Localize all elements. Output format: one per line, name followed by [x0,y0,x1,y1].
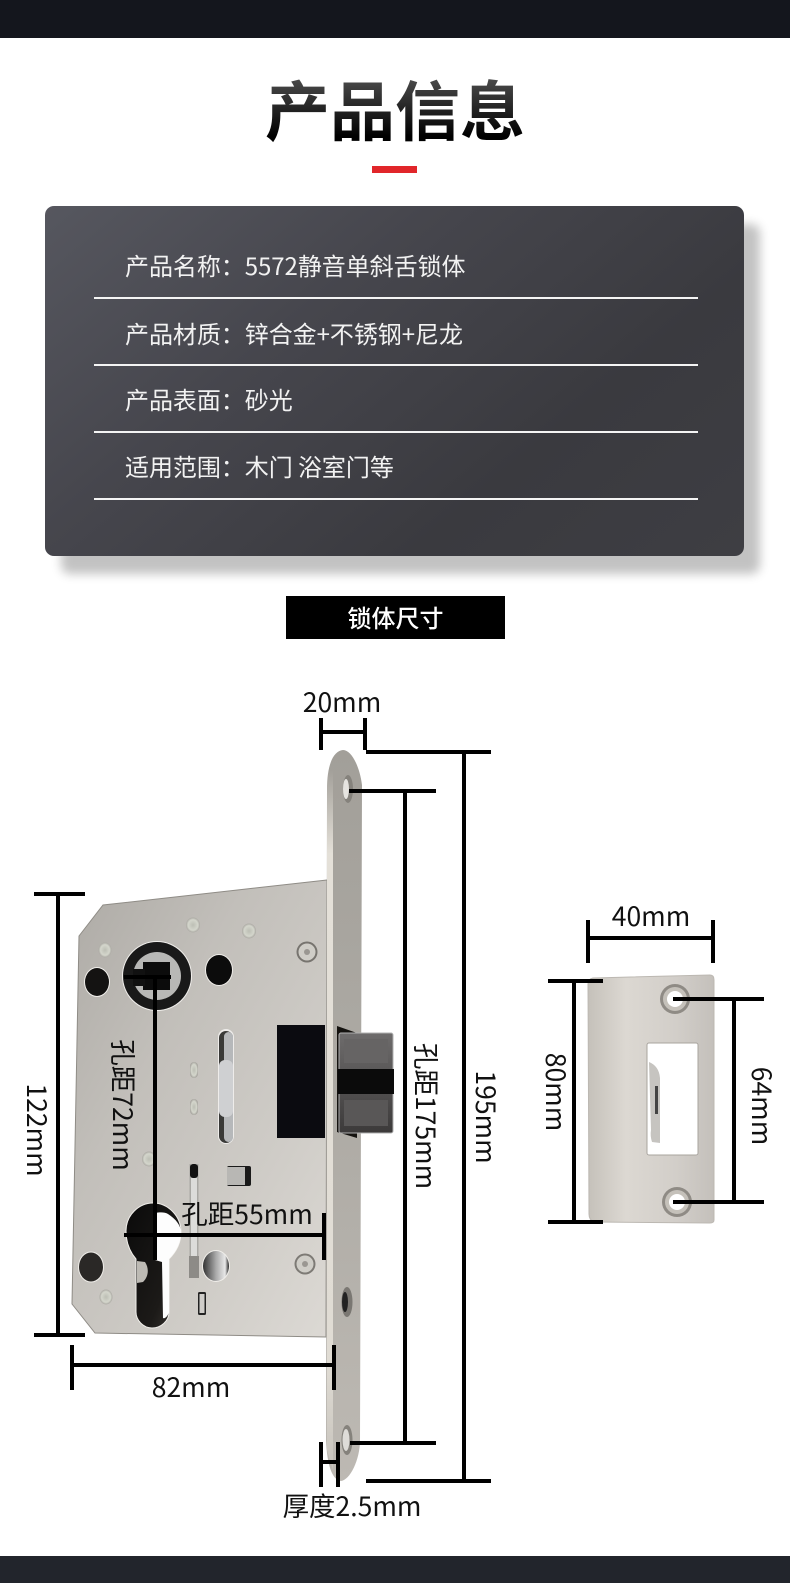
dimension: 122mm [19,894,85,1335]
dimension: thickness 2.5mm: 厚度2.5mm [283,1485,421,1524]
strike plate photo [588,975,714,1223]
black rectangular window [277,1025,325,1138]
spec row: name: 产品名称：5572静音单斜舌锁体 [125,247,465,282]
dimension: hole spacing 55mm [124,1193,324,1260]
dimension: 122mm: 122mm [19,1083,58,1177]
small square window [227,1166,251,1186]
dimension: 20mm: 20mm [303,681,381,720]
key spindle ring [122,941,192,1011]
title: 产品信息 [265,60,525,154]
dimension: hole spacing 55mm: 孔距55mm [181,1193,313,1232]
spec row: usage: 适用范围：木门 浴室门等 [125,448,394,483]
strike window [647,1043,698,1155]
strike screw holes [660,984,692,1217]
spec row: material: 产品材质：锌合金+不锈钢+尼龙 [125,315,463,350]
dimension: 82mm [72,1345,334,1405]
panel: product specs [45,206,744,556]
lock body photo [72,750,394,1481]
top dark band [0,0,790,38]
dimension: 82mm: 82mm [152,1366,230,1405]
dimension: thickness 2.5mm [283,1442,421,1524]
bottom dark band [0,1556,790,1583]
case plate [72,880,327,1337]
strike plate body [588,975,714,1223]
dimension: 40mm: 40mm [612,895,690,934]
spec row: surface: 产品表面：砂光 [125,381,293,416]
narrow vertical slot [189,1164,199,1278]
dimension: 64mm: 64mm [744,1067,783,1145]
screws [294,942,318,1274]
dimension: 20mm [303,681,381,750]
dimension: hole spacing 175mm: 孔距175mm [408,1043,447,1189]
title [195,65,595,149]
dimension: 40mm [588,895,713,963]
face plate [326,750,362,1481]
dimension: 80mm [538,981,603,1222]
latch slot [218,1029,234,1144]
section label: lock body size [286,596,505,639]
round holes [78,954,233,1282]
red accent bar [372,166,417,173]
dimension: hole spacing 72mm: 孔距72mm [105,1039,144,1171]
dimension: hole spacing 72mm [105,977,171,1260]
latch bolt [337,1026,394,1138]
rivets [98,918,256,1304]
dimension: 195mm: 195mm [468,1070,507,1164]
dimension: 80mm: 80mm [538,1053,577,1131]
section label: lock body size: 锁体尺寸 [348,599,444,634]
small bottom slot [198,1292,206,1315]
dimension: hole spacing 175mm [349,791,447,1443]
dimension: 195mm [366,752,507,1481]
dimension: 64mm [673,999,783,1202]
cylinder keyhole [126,1203,181,1328]
